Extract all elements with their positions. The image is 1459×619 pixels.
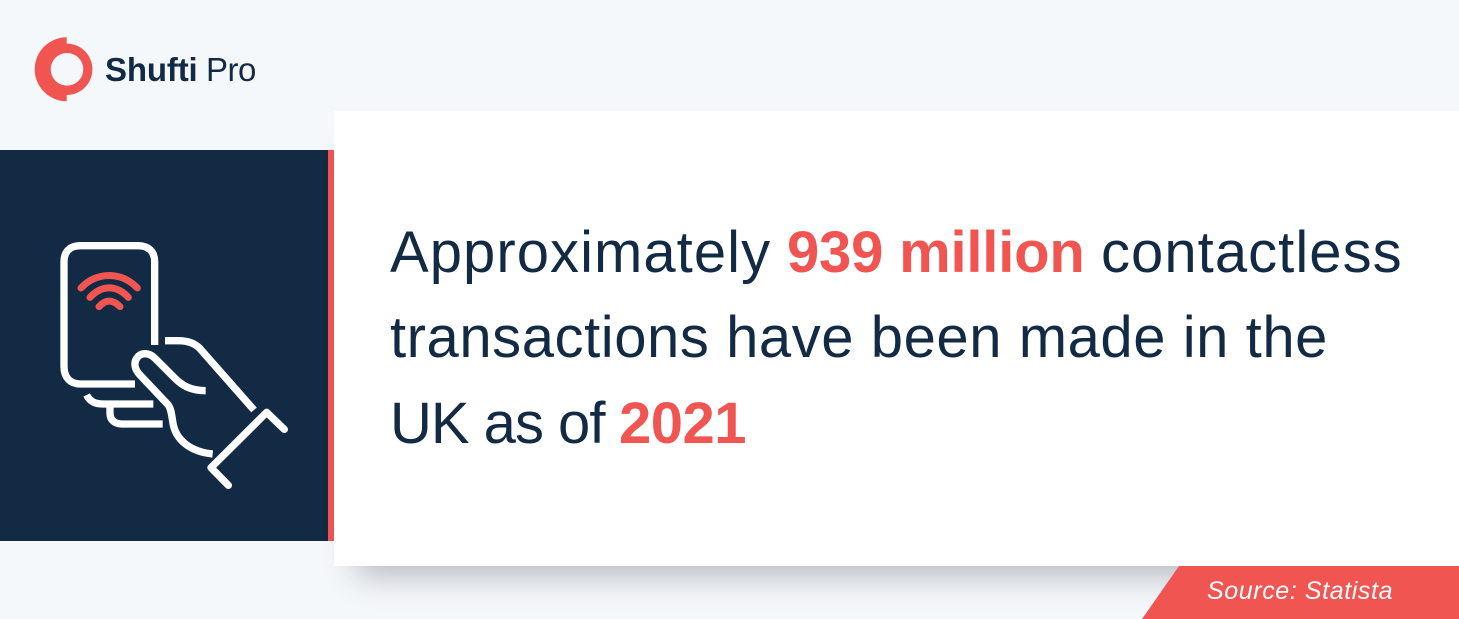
line 1: contactless [1101,220,1403,285]
source label: Source: Statista [1207,577,1393,605]
logo wordmark: Pro [206,51,256,88]
logo wordmark [105,51,256,88]
panel: white statement card [334,111,1459,566]
line 1: Approximately [390,220,771,285]
logo wordmark: Shufti [105,51,198,88]
icon: hand holding contactless card [60,242,288,489]
line 1: 939 million [787,220,1085,285]
hand [87,341,284,485]
line 3: UK as of [390,391,604,456]
line 3 [390,391,746,456]
ribbon shape [1142,566,1459,619]
source ribbon [1142,566,1459,619]
statement text [390,220,1403,456]
wifi symbol [81,276,137,307]
red accent bar [328,150,335,541]
logo mark [34,37,92,102]
line 2: transactions have been made in the [390,305,1328,370]
card outline [64,246,155,384]
line 1 [390,220,1403,285]
logo [34,37,256,102]
panel: navy icon panel [0,150,328,541]
line 3: 2021 [619,391,746,456]
